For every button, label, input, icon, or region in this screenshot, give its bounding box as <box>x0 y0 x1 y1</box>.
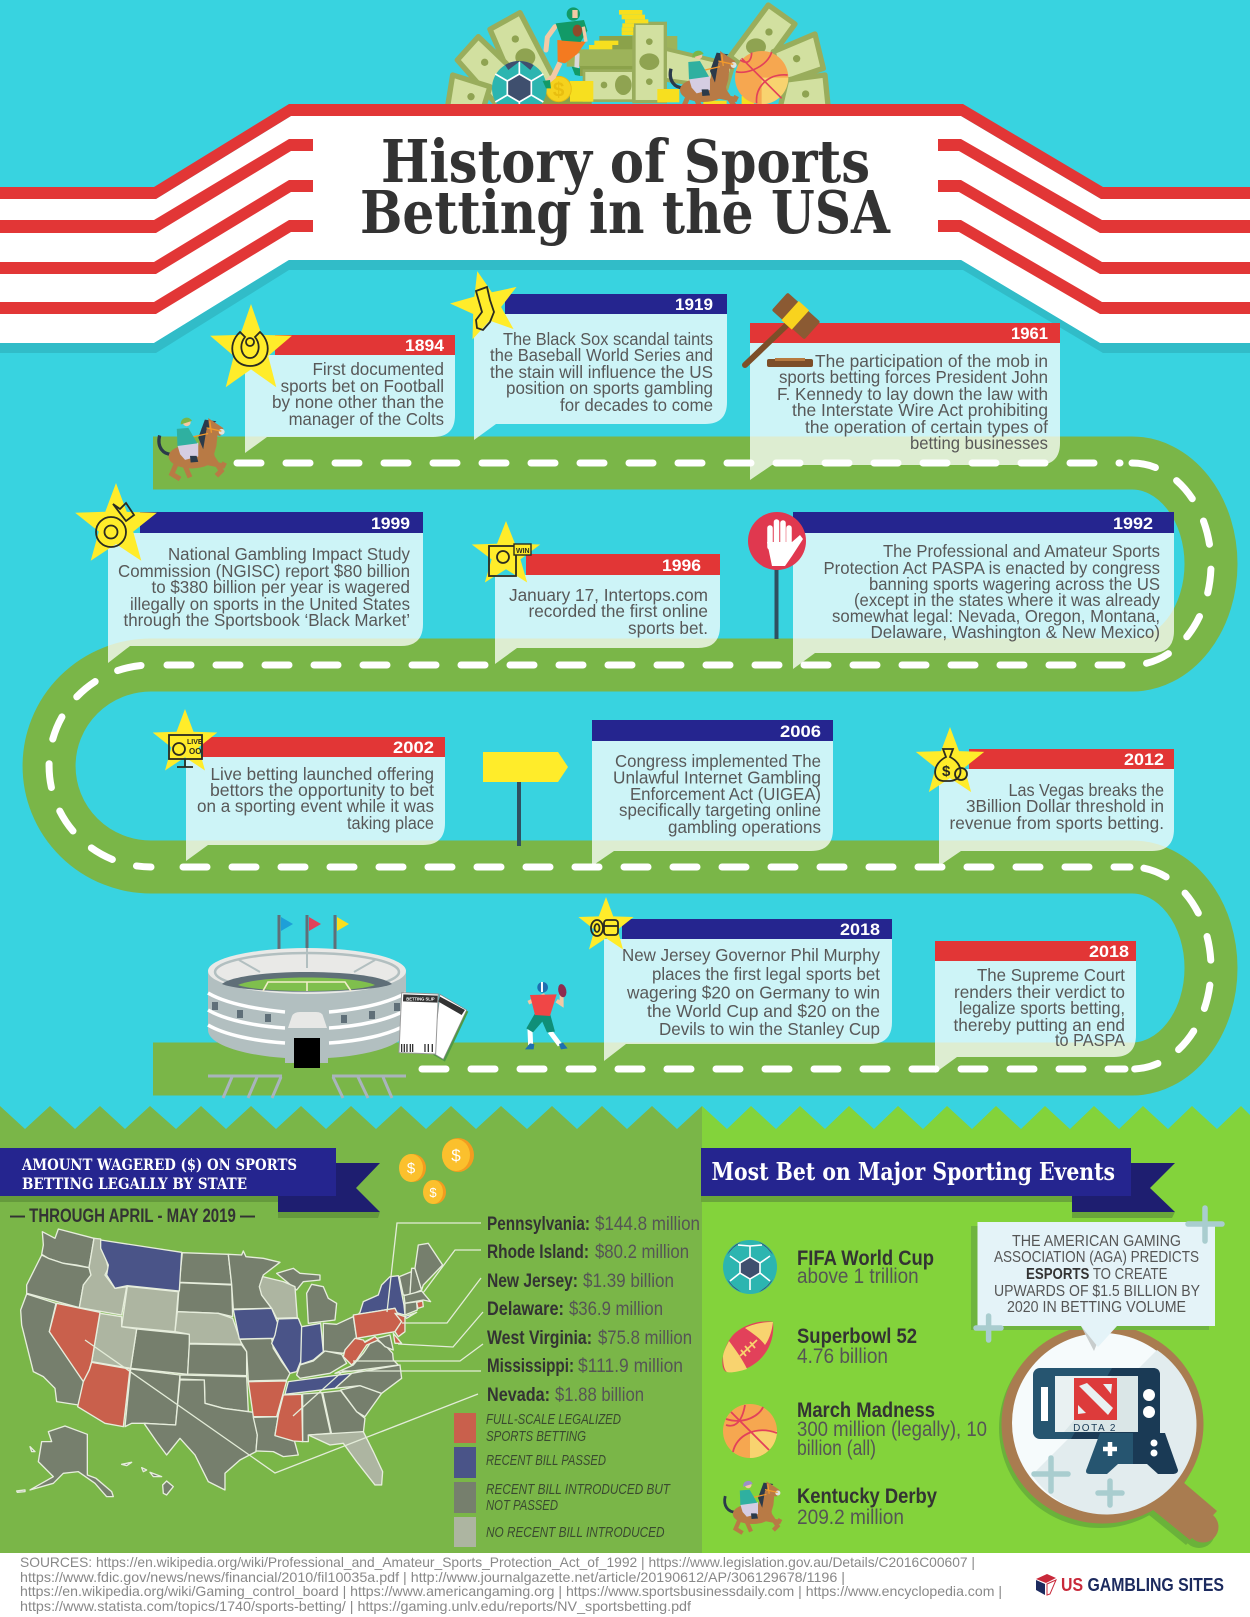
icon: gold coins: $ <box>407 1160 416 1177</box>
icon: gold coins <box>399 1138 474 1204</box>
event: Superbowl 52: Superbowl 52 <box>797 1325 917 1348</box>
card: 2006: Enforcement Act (UIGEA) <box>630 784 821 804</box>
event: Kentucky Derby <box>725 1481 937 1533</box>
card: 1992: somewhat legal: Nevada, Oregon, Montana, <box>832 606 1160 626</box>
icon: soccer ball <box>723 1240 777 1294</box>
heading ribbon: amount wagered: BETTING LEGALLY BY STATE <box>22 1174 247 1193</box>
card: 2012 <box>939 749 1174 866</box>
icon: gold coins: $ <box>451 1146 461 1165</box>
sources <box>20 1554 1002 1614</box>
event: Kentucky Derby: Kentucky Derby <box>797 1485 937 1508</box>
icon: star with money bag <box>916 727 984 792</box>
card: 1999: 1999 <box>371 514 410 533</box>
card: 1961: betting businesses <box>910 433 1048 453</box>
card: 1999: illegally on sports in the United States <box>130 594 410 614</box>
card: 1894: First documented <box>312 359 444 379</box>
card: 2018 Supreme Court <box>935 941 1136 1073</box>
footer panel <box>0 1553 1250 1617</box>
card: 2002: on a sporting event while it was <box>197 796 434 816</box>
card: 1961: The participation of the mob in <box>815 351 1048 371</box>
card: 1894: manager of the Colts <box>289 409 444 429</box>
card: 2018 Supreme Court: 2018 <box>1089 942 1129 961</box>
arrow sign <box>483 752 568 846</box>
card: 2002: bettors the opportunity to bet <box>210 780 434 800</box>
map legend: NOT PASSED <box>486 1497 558 1514</box>
icon: star with money bag: $ <box>942 763 951 780</box>
state totals list: $1.88 billion <box>555 1385 644 1406</box>
icon: star with win screen: WIN <box>516 548 530 555</box>
card: 1919: for decades to come <box>560 395 713 415</box>
illustration: money, athletes and balls above the banner: $ <box>553 79 565 102</box>
leader lines from states to labels <box>85 1223 483 1473</box>
footballer <box>543 7 587 88</box>
map legend: RECENT BILL INTRODUCED BUT <box>486 1481 671 1498</box>
card: 1999: National Gambling Impact Study <box>168 544 410 564</box>
state totals list: Rhode Island: <box>487 1242 589 1263</box>
card: 2018 New Jersey: New Jersey Governor Phil Murphy <box>622 945 880 965</box>
illustration: money, athletes and balls above the banner <box>447 5 828 116</box>
card: 2012: 2012 <box>1124 750 1164 769</box>
card: 1961: sports betting forces President John <box>779 367 1048 387</box>
card: 1894: by none other than the <box>272 392 444 412</box>
card: 1996: sports bet. <box>628 618 708 638</box>
betting slips: BETTING SLIP <box>406 997 435 1003</box>
event: FIFA World Cup <box>723 1240 934 1294</box>
icon: horse and jockey <box>725 1481 780 1533</box>
title: History of Sports <box>381 127 870 196</box>
state totals list: Nevada: <box>487 1385 550 1406</box>
state totals list: $75.8 million <box>598 1328 692 1349</box>
icon: quarterback player <box>525 982 568 1049</box>
card: 1961: F. Kennedy to lay down the law with <box>777 384 1048 404</box>
card: 1919: position on sports gambling <box>506 378 713 398</box>
icon: gavel <box>745 292 821 367</box>
state totals list: $36.9 million <box>569 1299 663 1320</box>
icon: star with sock <box>444 263 526 343</box>
sources: https://en.wikipedia.org/wiki/Gaming_control_board | https://www.americangaming.org | https://www.sportsbusinessdaily.com | https://www.encyclopedia.com | <box>20 1583 1002 1599</box>
event: Superbowl 52 <box>722 1321 917 1372</box>
card: 1999: Commission (NGISC) report $80 billion <box>118 561 410 581</box>
card: 2002 <box>186 737 445 861</box>
card: 2002: Live betting launched offering <box>210 764 434 784</box>
map legend: RECENT BILL PASSED <box>486 1452 606 1469</box>
card: 1992: Protection Act PASPA is enacted by congress <box>824 558 1160 578</box>
sources: https://www.fdic.gov/news/news/financial/2010/fil10035a.pdf | http://www.journalgazette.net/article/20190612/AP/306129678/1196 | <box>20 1569 845 1585</box>
card: 1961: the operation of certain types of <box>805 417 1048 437</box>
card: 2018 Supreme Court: renders their verdict to <box>954 982 1125 1002</box>
card: 1919: the stain will influence the US <box>490 362 713 382</box>
card: 1992: (except in the states where it was already <box>854 590 1160 610</box>
card: 1992: The Professional and Amateur Sports <box>883 541 1160 561</box>
icon: football <box>722 1321 773 1372</box>
event: March Madness: March Madness <box>797 1399 935 1422</box>
state totals list: Mississippi: <box>487 1356 574 1377</box>
card: 2018 New Jersey: places the first legal sports bet <box>652 964 880 984</box>
card: 2012: 3Billion Dollar threshold in <box>966 796 1164 816</box>
icon: star with live screen <box>153 709 217 771</box>
card: 1992: 1992 <box>1113 514 1153 533</box>
card: 1992: Delaware, Washington & New Mexico) <box>870 622 1160 642</box>
card: 2006: gambling operations <box>668 817 821 837</box>
heading ribbon: amount wagered: AMOUNT WAGERED ($) ON SPORTS <box>21 1155 297 1174</box>
icon: tracks in front of the stadium <box>208 1076 406 1098</box>
heading ribbon: most bet on major sporting events: Most Bet on Major Sporting Events <box>712 1157 1115 1186</box>
card: 2006: specifically targeting online <box>619 800 821 820</box>
card: 1894: sports bet on Football <box>281 376 444 396</box>
game controller <box>1086 1433 1178 1474</box>
card: 2018 New Jersey: 2018 <box>840 920 880 939</box>
state totals list: $80.2 million <box>595 1242 689 1263</box>
state totals list: New Jersey: <box>487 1271 578 1292</box>
card: 2018 Supreme Court: to PASPA <box>1055 1030 1125 1050</box>
sources: https://www.statista.com/topics/1740/sports-betting/ | https://gaming.unlv.edu/reports/NV_sportsbetting.pdf <box>20 1598 691 1614</box>
icon: gold coins: $ <box>429 1185 437 1200</box>
callout: esports prediction: 2020 IN BETTING VOLUME <box>1007 1299 1186 1316</box>
state totals list: Pennsylvania: <box>487 1214 590 1235</box>
map: US states <box>17 1229 443 1497</box>
card: 2018 Supreme Court: thereby putting an end <box>954 1015 1125 1035</box>
horse and jockey <box>670 51 737 113</box>
card: 1996 <box>495 554 720 664</box>
state totals list: West Virginia: <box>487 1328 592 1349</box>
event: March Madness <box>723 1399 987 1460</box>
map legend: NO RECENT BILL INTRODUCED <box>486 1524 665 1541</box>
callout: esports prediction: ESPORTS TO CREATE <box>1026 1266 1168 1283</box>
card: 2018 New Jersey: the World Cup and $20 on the <box>647 1001 880 1021</box>
state totals list: Delaware: <box>487 1299 564 1320</box>
banner: striped ribbon <box>0 104 1250 353</box>
event: FIFA World Cup: FIFA World Cup <box>797 1247 934 1270</box>
map legend: SPORTS BETTING <box>486 1428 586 1445</box>
card: 2006 <box>592 720 833 866</box>
icon: star with win screen <box>472 521 540 583</box>
card: 1999: to $380 billion per year is wagered <box>152 577 410 597</box>
state totals list: $1.39 billion <box>583 1271 674 1292</box>
card: 2018 Supreme Court: The Supreme Court <box>977 965 1125 985</box>
icon: star with horseshoe <box>210 304 292 387</box>
game device <box>1033 1368 1160 1439</box>
illustration: stadium with flags <box>205 915 409 1068</box>
callout: esports prediction: UPWARDS OF $1.5 BILLION BY <box>994 1283 1200 1300</box>
state totals list: $144.8 million <box>595 1214 700 1235</box>
card: 1919: the Baseball World Series and <box>490 345 713 365</box>
panel: right green section <box>702 1106 1250 1553</box>
icon: horse and jockey at the start of the road <box>159 418 225 479</box>
card: 2006: Unlawful Internet Gambling <box>613 768 821 788</box>
card: 2006: Congress implemented The <box>615 751 821 771</box>
card: 1919 <box>474 294 727 440</box>
winding road <box>49 463 1211 1069</box>
heading ribbon: amount wagered <box>0 1148 380 1218</box>
event: Superbowl 52: 4.76 billion <box>797 1345 888 1368</box>
card: 1999: through the Sportsbook ‘Black Market’ <box>124 610 410 630</box>
betting slips <box>399 993 468 1062</box>
icon: star with ball and crown <box>75 483 157 561</box>
card: 1961 <box>750 323 1060 480</box>
map legend: FULL-SCALE LEGALIZED <box>486 1411 621 1428</box>
card: 2002: taking place <box>347 813 434 833</box>
card: 1999 <box>108 512 423 663</box>
subheading: through april - may 2019: — THROUGH APRIL - MAY 2019 — <box>10 1206 255 1227</box>
icon: basketball <box>723 1404 777 1458</box>
map legend <box>454 1411 671 1547</box>
sources: SOURCES: https://en.wikipedia.org/wiki/Professional_and_Amateur_Sports_Protection_Act_of_1992 | https://www.legislation.gov.au/Details/C2016C00607 | <box>20 1554 975 1570</box>
icon: plus signs <box>976 1208 1222 1505</box>
card: 1992: banning sports wagering across the US <box>869 574 1160 594</box>
panel: left green section <box>0 1106 702 1553</box>
event: FIFA World Cup: above 1 trillion <box>797 1265 919 1288</box>
card: 1996: 1996 <box>662 556 701 575</box>
card: 2012: Las Vegas breaks the <box>1008 780 1164 800</box>
icon: star with coins <box>578 897 634 949</box>
icon: star with live screen: LIVE <box>187 739 203 746</box>
callout: esports prediction: THE AMERICAN GAMING <box>1012 1233 1181 1250</box>
event: March Madness: 300 million (legally), 10 <box>797 1418 987 1441</box>
heading ribbon: most bet on major sporting events <box>701 1148 1175 1218</box>
state totals list <box>487 1214 700 1406</box>
card: 2018 New Jersey: Devils to win the Stanley Cup <box>659 1019 880 1039</box>
card: 1919: 1919 <box>675 295 713 314</box>
card: 2018 New Jersey: wagering $20 on Germany to win <box>626 983 880 1003</box>
game device: DOTA 2 <box>1073 1423 1117 1434</box>
card: 1961: 1961 <box>1011 324 1048 343</box>
event: March Madness: billion (all) <box>797 1437 876 1460</box>
callout: esports prediction <box>971 1222 1215 1351</box>
logo: US Gambling Sites: US GAMBLING SITES <box>1061 1575 1224 1595</box>
card: 1894 <box>245 335 455 453</box>
title: Betting in the USA <box>360 178 891 247</box>
card: 1919: The Black Sox scandal taints <box>503 329 713 349</box>
card: 2006: 2006 <box>780 722 821 741</box>
stop sign with hand <box>748 512 806 639</box>
card: 2012: revenue from sports betting. <box>950 813 1164 833</box>
card: 1996: January 17, Intertops.com <box>509 585 708 605</box>
state totals list: $111.9 million <box>578 1356 683 1377</box>
card: 1961: the Interstate Wire Act prohibiting <box>792 400 1048 420</box>
card: 2018 New Jersey <box>604 919 892 1061</box>
card: 2002: 2002 <box>393 738 434 757</box>
callout: esports prediction: ASSOCIATION (AGA) PREDICTS <box>994 1249 1199 1266</box>
icon: star with live screen: OO <box>189 747 201 756</box>
card: 2018 Supreme Court: legalize sports betting, <box>959 998 1125 1018</box>
card: 1992 <box>793 512 1174 669</box>
card: 1996: recorded the first online <box>528 601 708 621</box>
title <box>360 127 891 247</box>
card: 1894: 1894 <box>405 336 445 355</box>
event: Kentucky Derby: 209.2 million <box>797 1506 904 1529</box>
illustration: magnifying glass with esports device <box>999 1324 1218 1548</box>
